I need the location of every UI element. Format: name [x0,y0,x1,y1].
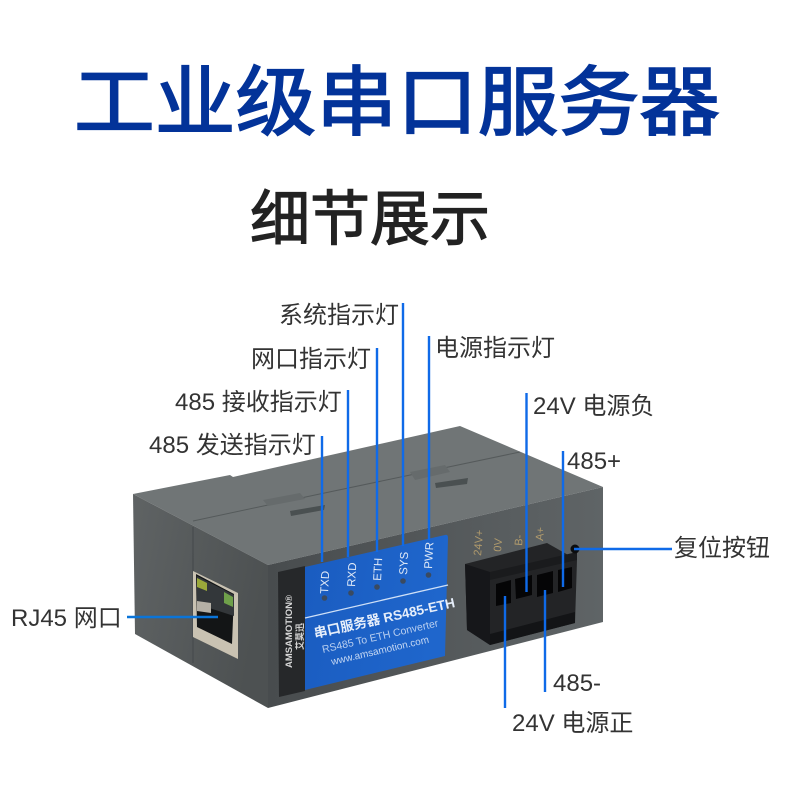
device left face [133,494,268,708]
callout: 485 receive LED: 485 接收指示灯 [175,389,342,416]
callout: 485- [545,590,601,697]
callout: power LED: 电源指示灯 [435,335,555,362]
label url: www.amsamotion.com [329,635,430,668]
callout: 485-: 485- [553,670,601,697]
device front face [268,487,603,708]
LED labels: RXD [346,562,359,587]
reset button [570,544,580,554]
callout: 24V positive: 24V 电源正 [512,710,633,737]
terminal labels: 0V [492,537,505,552]
RJ45 port [193,571,238,659]
label: blue panel [305,535,448,690]
LED labels: SYS [398,551,411,575]
label product name: 串口服务器 RS485-ETH [312,594,456,641]
label: black strip [278,566,305,697]
callout: reset button: 复位按钮 [674,535,770,562]
callout: 485+: 485+ [567,448,621,475]
terminal labels [472,527,547,556]
callout: 485 send LED: 485 发送指示灯 [149,432,316,459]
brand text: AMSAMOTION® [284,595,295,668]
terminal labels: B- [513,534,526,546]
callout: 485+ [563,448,621,587]
device top face [133,426,603,565]
title: 工业级串口服务器 [74,42,720,152]
terminal labels: A+ [534,527,547,541]
callout: network LED: 网口指示灯 [251,346,371,373]
top clips [263,465,468,516]
brand text chinese: 艾莫迅 [294,623,305,650]
terminal labels: 24V+ [472,529,486,556]
LED labels: ETH [372,558,385,581]
LED labels: TXD [319,571,332,594]
terminal connector [465,543,577,645]
subtitle: 细节展示 [250,171,490,258]
callout: system LED: 系统指示灯 [279,302,399,329]
LED labels [319,542,436,601]
device: serial server [133,426,603,708]
callout: RJ45 port: RJ45 网口 [11,605,122,632]
callout: 24V negative: 24V 电源负 [533,393,654,420]
label subtitle: RS485 To ETH Converter [321,617,440,656]
LED labels: PWR [423,542,436,569]
